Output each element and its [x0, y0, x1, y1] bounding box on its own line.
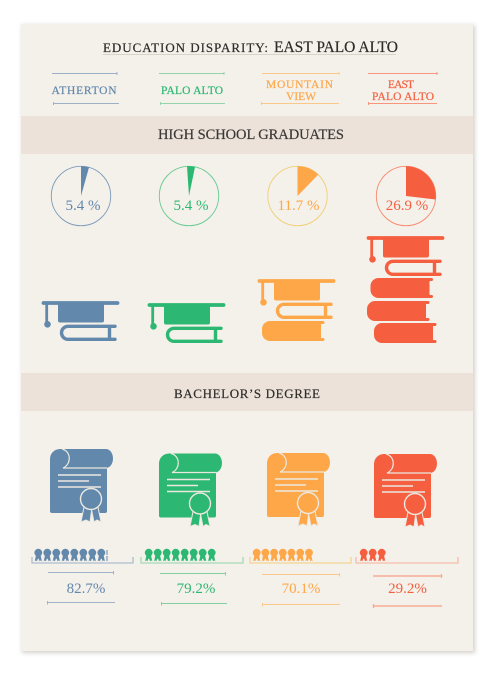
- pie: Palo Alto 5.4%: 5.4 %: [174, 198, 208, 214]
- band: bachelor's degree: [21, 373, 473, 411]
- title: EAST PALO ALTO: [274, 39, 398, 56]
- value: Palo Alto 79.2%: [160, 572, 227, 606]
- band: high school graduates: HIGH SCHOOL GRADUATES: [158, 127, 344, 143]
- legend: East Palo Alto: EAST: [388, 79, 414, 91]
- pie: East Palo Alto 26.9%: [376, 166, 436, 226]
- value: Atherton 82.7%: 82.7%: [67, 581, 105, 597]
- pictogram: Mountain View 70.1%: [250, 549, 351, 563]
- pie: Atherton 5.4%: 5.4 %: [66, 198, 100, 214]
- legend: Atherton: [52, 72, 119, 105]
- pie: Palo Alto 5.4%: [159, 166, 219, 226]
- value: Mountain View 70.1%: [262, 573, 340, 606]
- icon: cap and book, Atherton: [44, 303, 118, 339]
- value: East Palo Alto 29.2%: [373, 574, 442, 608]
- pie: Mountain View 11.7%: [268, 166, 327, 226]
- title: [103, 39, 398, 56]
- pictogram: Atherton 82.7%: [32, 549, 133, 563]
- value: Atherton 82.7%: [47, 571, 115, 604]
- icon: diploma, Atherton: [50, 449, 113, 522]
- legend: Palo Alto: [159, 72, 225, 105]
- legend: East Palo Alto: [368, 72, 437, 105]
- legend: Mountain View: [262, 72, 339, 105]
- pie: Atherton 5.4%: [51, 166, 111, 226]
- pie: East Palo Alto 26.9%: 26.9 %: [386, 198, 428, 214]
- band: bachelor's degree: BACHELOR’S DEGREE: [174, 386, 320, 401]
- icon: diploma, East Palo Alto: [374, 454, 437, 527]
- value: East Palo Alto 29.2%: 29.2%: [388, 581, 427, 597]
- legend: Palo Alto: PALO ALTO: [161, 85, 223, 97]
- value: Mountain View 70.1%: 70.1%: [282, 581, 320, 597]
- icon: cap and books, East Palo Alto: [367, 238, 442, 343]
- band: high school graduates: [21, 116, 473, 154]
- icon: diploma, Mountain View: [267, 453, 330, 526]
- pictogram: Palo Alto 79.2%: [141, 549, 243, 563]
- legend: Mountain View: VIEW: [286, 91, 316, 103]
- title: EDUCATION DISPARITY:: [103, 40, 268, 55]
- icon: cap and books, Mountain View: [260, 281, 334, 341]
- value: Palo Alto 79.2%: 79.2%: [177, 581, 215, 597]
- pictogram: East Palo Alto 29.2%: [356, 549, 458, 563]
- icon: diploma, Palo Alto: [159, 454, 222, 526]
- legend: East Palo Alto: PALO ALTO: [372, 91, 434, 103]
- pie: Mountain View 11.7%: 11.7 %: [278, 198, 319, 214]
- icon: cap and book, Palo Alto: [150, 305, 224, 341]
- legend: Mountain View: MOUNTAIN: [266, 79, 334, 91]
- legend: Atherton: ATHERTON: [52, 85, 117, 97]
